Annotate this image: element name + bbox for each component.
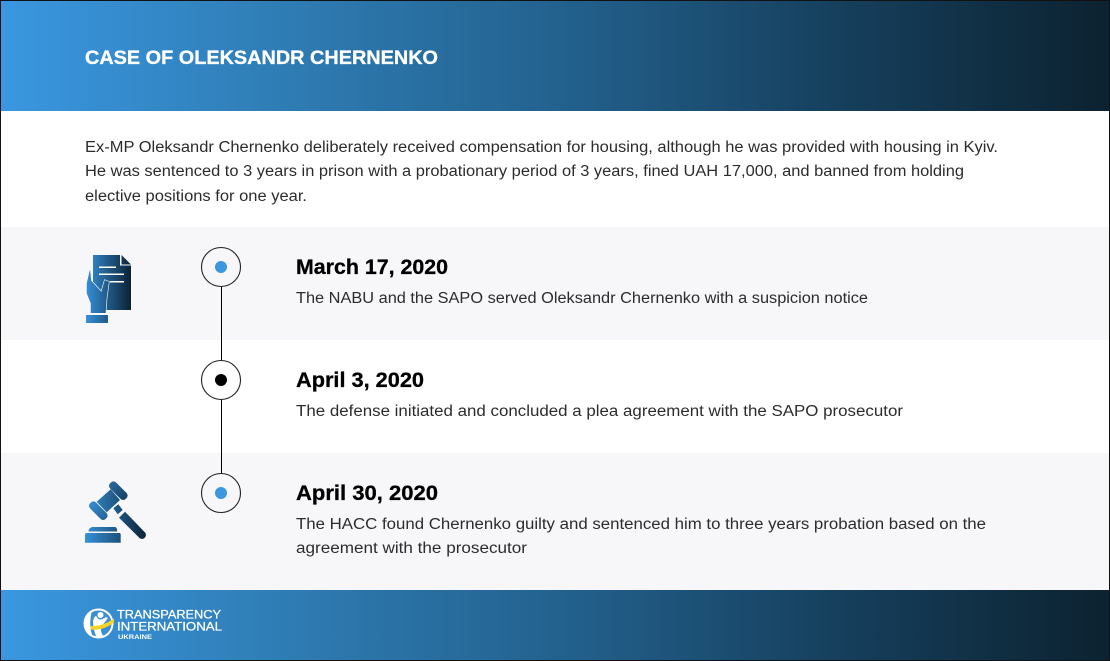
intro text block: elective positions for one year.	[85, 188, 307, 205]
event: April 30, 2020: agreement with the prosecutor	[296, 540, 527, 557]
event: March 17, 2020	[296, 256, 868, 307]
intro text block: He was sentenced to 3 years in prison with a probationary period of 3 years, fined UAH 17,000, and banned from holding	[85, 163, 964, 180]
icon: hand holding document	[86, 255, 131, 323]
logo: Transparency International Ukraine: UKRAINE	[118, 634, 153, 641]
icon: judge gavel	[85, 480, 146, 543]
event: April 30, 2020: The HACC found Chernenko guilty and sentenced him to three years probation based on the	[296, 516, 986, 533]
header band	[0, 0, 1110, 111]
timeline connector: upper	[221, 286, 222, 361]
row background: April 30	[0, 453, 1110, 590]
logo: Transparency International Ukraine: TRANSPARENCY	[117, 608, 221, 622]
timeline connector: lower	[221, 399, 222, 474]
event: April 3, 2020: April 3, 2020	[296, 369, 424, 392]
event: March 17, 2020: March 17, 2020	[296, 256, 448, 279]
title: CASE OF OLEKSANDR CHERNENKO	[85, 47, 438, 69]
event: April 3, 2020	[296, 369, 903, 420]
event: March 17, 2020: The NABU and the SAPO served Oleksandr Chernenko with a suspicion notice	[296, 290, 868, 307]
footer band	[0, 590, 1110, 661]
event: April 3, 2020: The defense initiated and concluded a plea agreement with the SAPO prosecutor	[296, 403, 903, 420]
row background: March 17	[0, 227, 1110, 340]
intro text block: Ex-MP Oleksandr Chernenko deliberately received compensation for housing, although he was provided with housing in Kyiv.	[85, 139, 998, 156]
logo: Transparency International Ukraine: INTERNATIONAL	[117, 620, 222, 634]
timeline marker: March 17	[202, 248, 240, 286]
event: April 30, 2020: April 30, 2020	[296, 482, 438, 505]
timeline marker: April 3	[202, 360, 240, 400]
intro text block	[85, 139, 998, 205]
event: April 30, 2020	[296, 482, 986, 557]
logo: Transparency International Ukraine	[84, 608, 222, 641]
timeline marker: April 30	[202, 474, 240, 512]
